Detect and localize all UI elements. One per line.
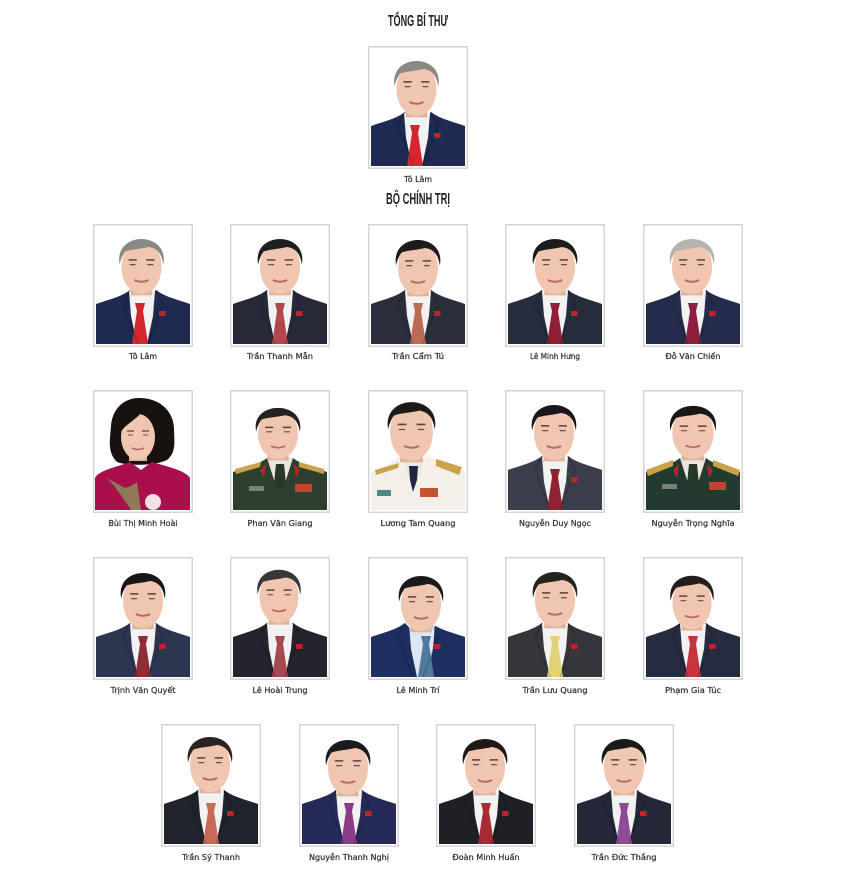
name: Phạm Gia Túc <box>665 686 721 696</box>
photo <box>371 402 465 510</box>
name: Nguyễn Trọng Nghĩa <box>652 518 735 528</box>
photo <box>577 739 671 844</box>
portrait card: Trần Sỹ Thanh <box>162 725 260 862</box>
photo <box>233 570 327 677</box>
photo <box>233 239 327 344</box>
portrait card: Trần Lưu Quang <box>506 558 604 695</box>
name: Trịnh Văn Quyết <box>109 685 176 696</box>
portrait card: Tô Lâm <box>94 225 192 361</box>
portrait card: Phạm Gia Túc <box>644 558 742 696</box>
portrait card: Đoàn Minh Huấn <box>437 725 535 862</box>
photo <box>508 405 602 510</box>
portrait card: Nguyễn Trọng Nghĩa <box>644 391 742 528</box>
name: Nguyễn Thanh Nghị <box>309 852 389 863</box>
portrait card: Phan Văn Giang <box>231 391 329 528</box>
photo <box>646 239 740 344</box>
photo <box>371 576 465 677</box>
portrait card: Lê Minh Trí <box>369 558 467 695</box>
portrait card: Lê Minh Hưng <box>506 225 604 361</box>
name: Trần Đức Thắng <box>590 852 657 862</box>
name: Đỗ Văn Chiến <box>666 351 720 361</box>
name: Bùi Thị Minh Hoài <box>108 519 178 529</box>
portrait card: Trần Thanh Mẫn <box>231 225 329 361</box>
photo <box>646 406 740 510</box>
photo <box>96 573 190 677</box>
photo <box>371 61 465 166</box>
name: Lê Hoài Trung <box>252 685 308 695</box>
photo <box>371 240 465 344</box>
name: Trần Thanh Mẫn <box>246 351 313 361</box>
heading: general secretary: TỔNG BÍ THƯ <box>388 11 448 30</box>
name: Trần Cẩm Tú <box>391 351 444 361</box>
portrait card: Trần Đức Thắng <box>575 725 673 862</box>
photo <box>508 572 602 677</box>
photo <box>95 398 190 510</box>
portrait card: Tô Lâm (General Secretary) <box>369 47 467 184</box>
portrait card: Trần Cẩm Tú <box>369 225 467 361</box>
portrait card: Nguyễn Duy Ngọc <box>506 391 604 528</box>
portrait card: Trịnh Văn Quyết <box>94 558 192 696</box>
name: Tô Lâm <box>128 351 157 361</box>
name: Phan Văn Giang <box>248 519 312 528</box>
photo <box>646 576 740 677</box>
heading: politburo: BỘ CHÍNH TRỊ <box>386 189 450 208</box>
photo <box>233 408 327 510</box>
photo <box>96 239 190 344</box>
portrait card: Bùi Thị Minh Hoài <box>94 391 192 529</box>
name: Trần Sỹ Thanh <box>181 852 240 862</box>
photo <box>508 239 602 344</box>
photo <box>439 739 533 844</box>
portrait card: Lê Hoài Trung <box>231 558 329 695</box>
name: Trần Lưu Quang <box>521 685 588 695</box>
portrait card: Đỗ Văn Chiến <box>644 225 742 361</box>
name: Đoàn Minh Huấn <box>452 852 520 862</box>
name: Lương Tam Quang <box>380 519 456 528</box>
photo <box>302 740 396 844</box>
name: Lê Minh Hưng <box>530 351 580 361</box>
portrait card: Nguyễn Thanh Nghị <box>300 725 398 863</box>
name: Tô Lâm <box>403 174 432 184</box>
name: Nguyễn Duy Ngọc <box>519 518 591 528</box>
name: Lê Minh Trí <box>396 685 440 695</box>
portrait card: Lương Tam Quang <box>369 391 467 528</box>
photo <box>164 737 258 844</box>
